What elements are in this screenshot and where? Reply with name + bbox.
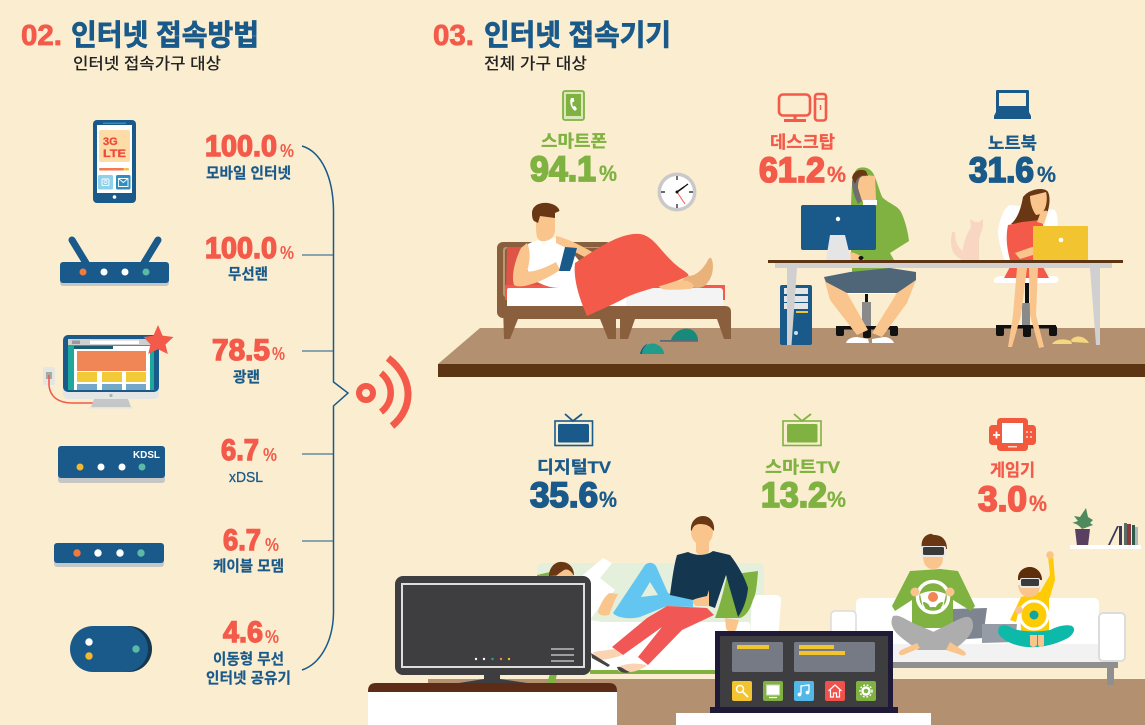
stat: game console 3.0%: 3.0 — [978, 480, 1027, 519]
heading: 03: 인터넷 접속기기 — [484, 19, 671, 52]
icon: wireless router — [60, 240, 169, 286]
icon: fibre LAN monitor — [43, 325, 174, 408]
value: wireless LAN 100.0% — [205, 232, 294, 283]
stat: digital TV 35.6%: 디지털TV — [537, 458, 612, 477]
illustration: wall clock — [658, 172, 696, 212]
icon: smartphone — [93, 120, 136, 203]
stat: smartphone 94.1%: 스마트폰 — [541, 132, 607, 151]
scene: living room floor — [428, 679, 1145, 725]
value: portable wifi 4.6%: 인터넷 공유기 — [206, 670, 291, 687]
panel: 02 internet connection methods — [21, 19, 408, 687]
stat: desktop 61.2%: 데스크탑 — [770, 133, 835, 152]
icon: home app — [825, 681, 845, 701]
stat: smartphone 94.1% — [530, 132, 617, 189]
stat: laptop 31.6%: % — [1037, 162, 1056, 187]
illustration: desk and computer tower — [768, 260, 1123, 345]
value: fibre LAN 78.5%: % — [272, 344, 285, 364]
value: portable wifi 4.6% — [206, 616, 291, 687]
value: cable modem 6.7%: 6.7 — [223, 524, 261, 557]
heading: 02: 인터넷 접속방법 — [71, 19, 259, 52]
value: fibre LAN 78.5% — [212, 334, 285, 386]
value: xDSL 6.7% — [221, 434, 277, 486]
stat: game console 3.0%: 게임기 — [990, 461, 1035, 480]
value: mobile internet 100.0%: 100.0 — [205, 130, 277, 163]
bracket connecting methods — [302, 146, 348, 670]
value: xDSL 6.7%: 6.7 — [221, 434, 259, 467]
value: portable wifi 4.6%: 4.6 — [223, 616, 263, 649]
value: fibre LAN 78.5%: 78.5 — [212, 334, 270, 367]
panel: 03 internet access devices — [368, 19, 1145, 725]
value: xDSL 6.7%: % — [263, 445, 277, 465]
scene: bedroom floor — [438, 328, 1145, 377]
stat: desktop 61.2%: % — [827, 162, 846, 187]
stat: laptop 31.6%: 31.6 — [969, 151, 1034, 190]
stat: digital TV 35.6%: % — [599, 487, 617, 512]
heading: 03: 03. — [433, 20, 474, 52]
illustration: couple on sofa — [537, 516, 781, 683]
subheading: base of all households: 전체 가구 대상 — [484, 55, 587, 73]
value: wireless LAN 100.0%: % — [280, 243, 294, 263]
stat: game console 3.0%: % — [1029, 491, 1047, 516]
value: wireless LAN 100.0%: 무선랜 — [228, 266, 268, 283]
stat: smart TV 13.2%: 스마트TV — [765, 458, 841, 477]
stat: laptop 31.6%: 노트북 — [988, 134, 1037, 153]
illustration: digital TV set on stand — [368, 576, 617, 725]
value: portable wifi 4.6%: % — [265, 627, 279, 647]
value: xDSL 6.7%: xDSL — [229, 469, 263, 486]
value: mobile internet 100.0%: 모바일 인터넷 — [206, 165, 291, 182]
stat: desktop 61.2% — [759, 133, 846, 190]
icon: digital TV — [555, 414, 592, 446]
value: fibre LAN 78.5%: 광랜 — [233, 369, 260, 386]
icon: smart TV — [783, 414, 821, 446]
icon: smartphone: LTE — [103, 148, 126, 160]
stat: laptop 31.6% — [969, 134, 1056, 190]
illustration: slippers — [640, 329, 698, 354]
illustration: smart TV app screen — [676, 631, 931, 725]
illustration: woman on laptop — [994, 189, 1089, 348]
icon: music app — [794, 681, 814, 701]
icon: settings app — [856, 681, 876, 701]
value: wireless LAN 100.0%: 100.0 — [205, 232, 277, 265]
icon: smartphone: 3G — [103, 136, 118, 148]
value: portable wifi 4.6%: 이동형 무선 — [213, 651, 284, 668]
icon: KDSL modem: KDSL — [133, 450, 160, 461]
illustration: pink cat — [951, 219, 983, 260]
icon: wifi signal — [359, 358, 408, 426]
icon: laptop — [994, 90, 1031, 119]
illustration: man at desktop — [801, 167, 916, 343]
stat: game console 3.0% — [978, 461, 1047, 519]
icon: smartphone device — [563, 91, 584, 120]
illustration: man in bed with phone — [497, 203, 731, 339]
icon: KDSL modem — [58, 446, 165, 483]
icon: TV app — [763, 681, 783, 701]
icon: cable modem — [54, 543, 164, 567]
value: mobile internet 100.0% — [205, 130, 294, 182]
icon: portable wifi router — [70, 626, 152, 672]
value: cable modem 6.7%: 케이블 모뎀 — [213, 558, 284, 575]
illustration: wall shelf with plant and books — [1070, 508, 1141, 549]
stat: desktop 61.2%: 61.2 — [759, 151, 825, 190]
icon: desktop computer — [779, 94, 826, 120]
heading: 02: 02. — [21, 20, 62, 52]
stat: smartphone 94.1%: % — [599, 161, 617, 186]
stat: smartphone 94.1%: 94.1 — [530, 150, 596, 189]
value: cable modem 6.7% — [213, 524, 284, 575]
stat: digital TV 35.6% — [530, 458, 617, 515]
icon: search app — [732, 681, 752, 701]
stat: smart TV 13.2%: 13.2 — [761, 476, 827, 515]
value: cable modem 6.7%: % — [265, 535, 279, 555]
stat: digital TV 35.6%: 35.6 — [530, 476, 598, 515]
stat: smart TV 13.2%: % — [827, 487, 846, 512]
stat: smart TV 13.2% — [761, 458, 846, 515]
icon: game console — [989, 418, 1036, 451]
value: mobile internet 100.0%: % — [280, 141, 294, 161]
illustration: sofa with VR gamers — [830, 533, 1125, 685]
subheading: base of internet households: 인터넷 접속가구 대상 — [73, 55, 221, 73]
